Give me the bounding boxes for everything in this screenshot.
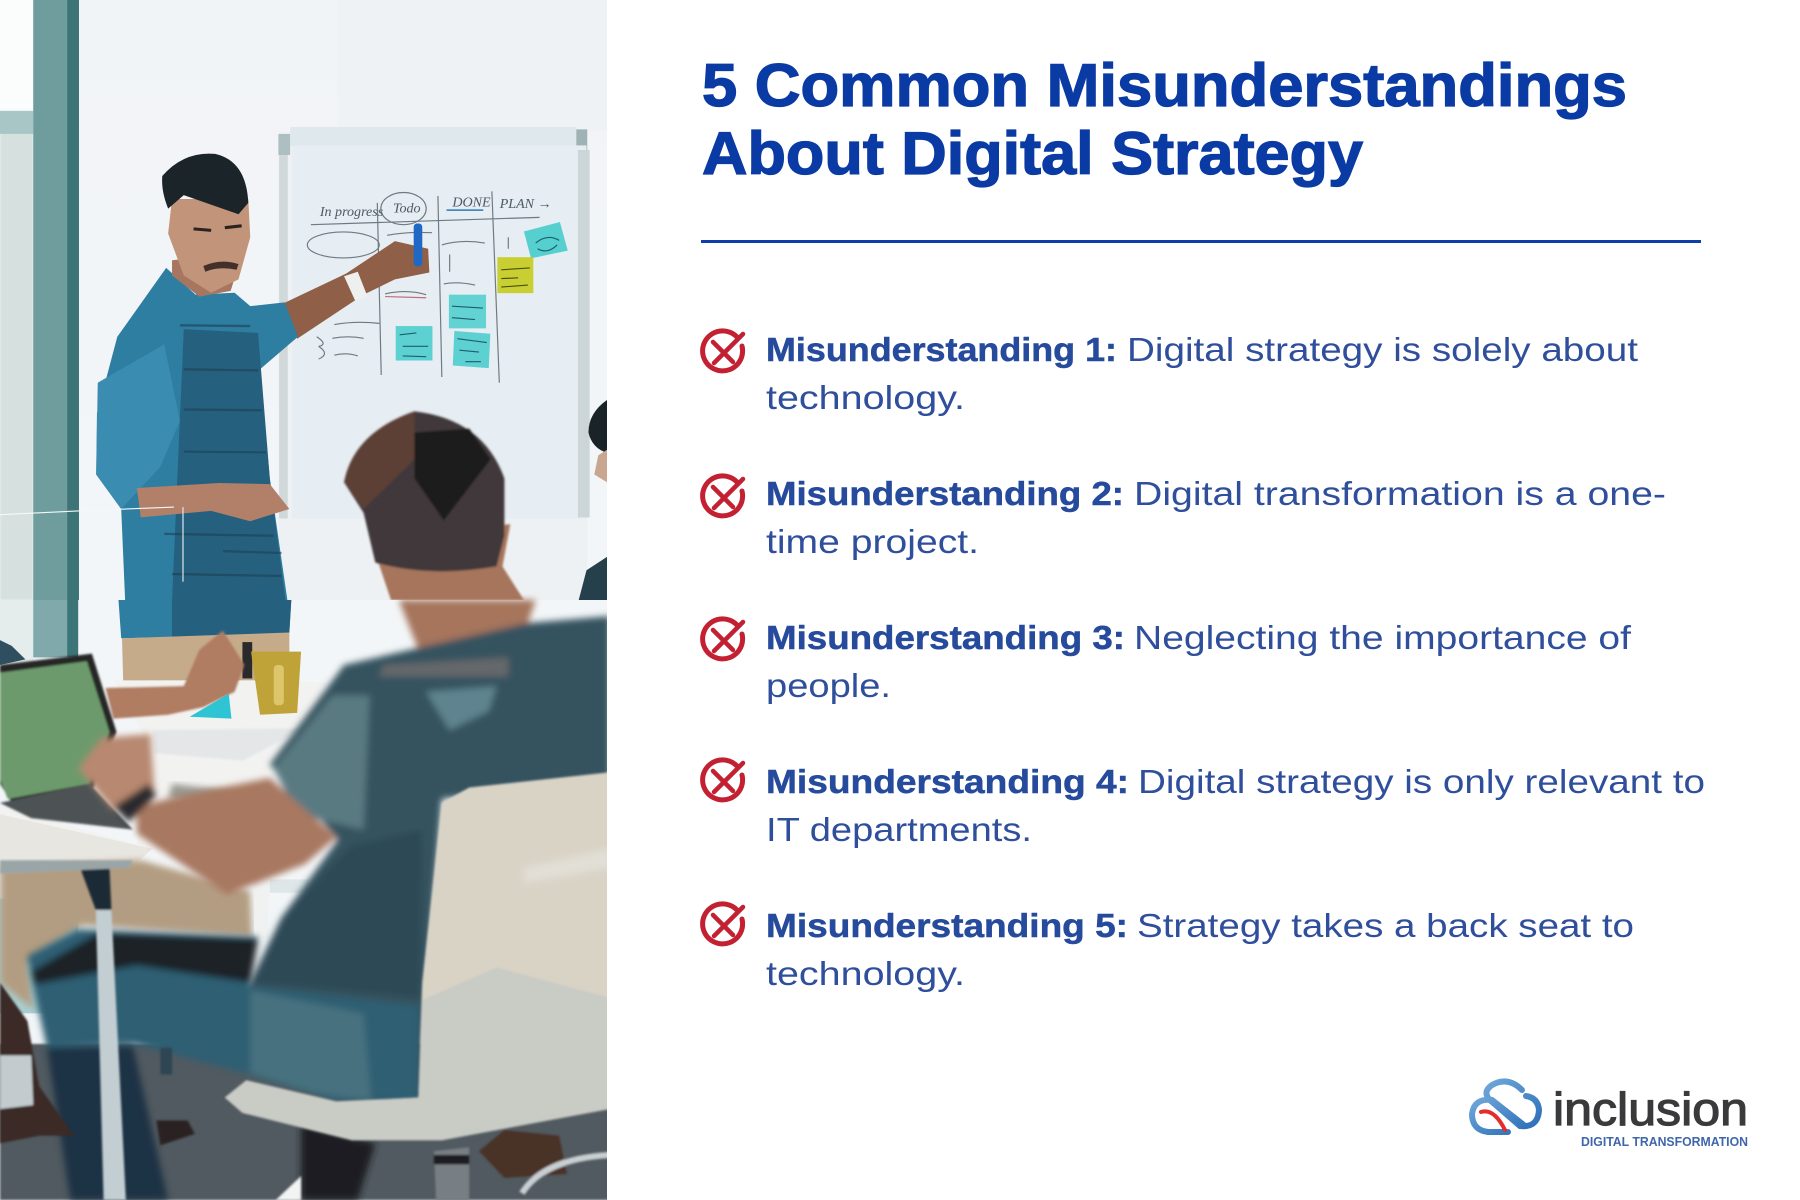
chart headings: In progress <box>319 205 383 220</box>
list item 2 <box>703 475 1666 560</box>
icon: red cross mark <box>703 619 743 659</box>
shoes and floor objects <box>0 983 610 1200</box>
list item 1 <box>703 331 1638 416</box>
list item 5: technology. <box>766 955 965 992</box>
top half of photo scene <box>0 0 610 600</box>
flip chart: DONE <box>451 196 491 211</box>
flip chart <box>278 127 590 518</box>
glass reflection pole <box>0 860 133 1200</box>
yellow mug <box>251 652 301 715</box>
list item 2: Misunderstanding 2: <box>766 475 1124 512</box>
list item 3: Misunderstanding 3: <box>766 619 1125 656</box>
list item 4: IT departments. <box>766 811 1032 848</box>
seated man <box>78 600 610 1105</box>
title <box>702 52 1627 187</box>
list item 1: Digital strategy is solely about <box>1127 331 1638 368</box>
flip chart: Todo <box>393 202 421 216</box>
left shirt fragment <box>0 640 25 665</box>
flip chart: PLAN → <box>499 197 552 212</box>
photo: presenter at flip chart in a meeting room <box>0 0 610 1200</box>
list item 3: people. <box>766 667 891 704</box>
list item 2: time project. <box>766 523 979 560</box>
table with papers <box>0 726 296 866</box>
sticky notes <box>396 222 568 368</box>
icon: red cross mark <box>703 476 743 516</box>
seated man's head <box>344 411 524 600</box>
list item 3: Neglecting the importance of <box>1134 619 1632 656</box>
logo: inclusion digital transformation: DIGITAL TRANSFORMATION <box>1581 1135 1748 1149</box>
title: 5 Common Misunderstandings <box>702 52 1627 119</box>
list item 5: Misunderstanding 5: <box>766 907 1128 944</box>
list item 4: Digital strategy is only relevant to <box>1138 763 1705 800</box>
presenter <box>0 154 429 600</box>
list item 2: Digital transformation is a one- <box>1134 475 1666 512</box>
blue jeans leg <box>27 929 418 1200</box>
person at the right edge <box>579 398 610 600</box>
icon: cloud waves <box>1472 1081 1539 1132</box>
icon: red cross mark <box>703 760 743 800</box>
list item 4: Misunderstanding 4: <box>766 763 1129 800</box>
laptop <box>0 654 133 830</box>
list item 1: Misunderstanding 1: <box>766 331 1117 368</box>
lower half of photo scene <box>0 600 610 1200</box>
logo: inclusion digital transformation: inclusion <box>1553 1083 1748 1135</box>
list item 5: Strategy takes a back seat to <box>1137 907 1634 944</box>
list item 4 <box>703 760 1705 848</box>
icon: red cross mark <box>703 904 743 944</box>
hand and arm at table <box>106 631 244 719</box>
title: About Digital Strategy <box>702 120 1364 187</box>
logo: inclusion digital transformation <box>1472 1081 1748 1149</box>
seated person's trousers <box>0 860 252 1009</box>
presenter lower shirt and trousers <box>118 600 291 680</box>
list item 5 <box>703 904 1634 992</box>
white chair <box>225 772 610 1140</box>
icon: red cross mark <box>703 331 743 371</box>
list item 1: technology. <box>766 379 965 416</box>
list item 3 <box>703 619 1632 704</box>
